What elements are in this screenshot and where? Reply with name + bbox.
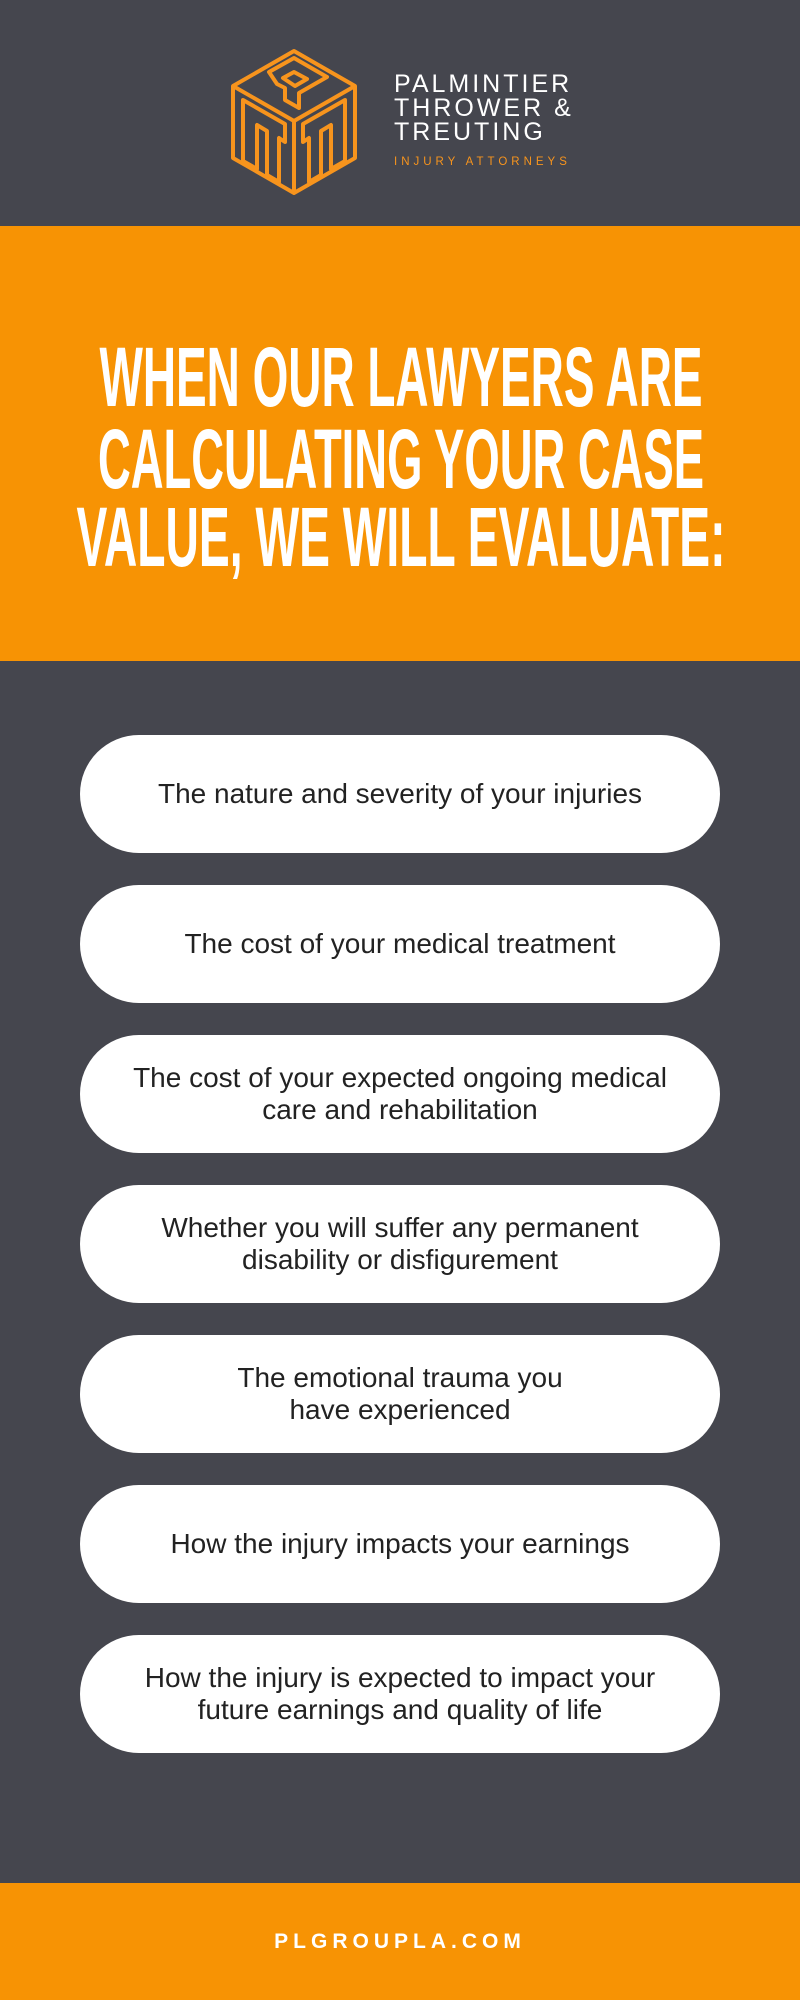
pill 7: future earnings and quality of life [198,1694,602,1725]
pill 5: have experienced [289,1394,511,1425]
logo text: THROWER & [394,94,574,122]
pill 4: Whether you will suffer any permanent [161,1212,639,1243]
pill 3 [80,1035,720,1153]
pill 7 [80,1635,720,1753]
pill 2: The cost of your medical treatment [184,928,616,959]
header: logo: INJURY ATTORNEYS [394,156,571,168]
list of factors [80,735,720,1753]
icon: cube logo [231,49,357,195]
pill 6 [80,1485,720,1603]
footer [0,1883,800,2000]
header: logo [0,0,800,224]
pill 4 [80,1185,720,1303]
logo text: TREUTING [394,118,546,146]
pill 1 [80,735,720,853]
pill 7: How the injury is expected to impact your [145,1662,655,1693]
pill 6: How the injury impacts your earnings [170,1528,630,1559]
pill 3: The cost of your expected ongoing medical [133,1062,667,1093]
pill 1: The nature and severity of your injuries [158,778,642,809]
logo text: PALMINTIER [394,70,572,98]
title band [0,226,800,661]
pill 5 [80,1335,720,1453]
logo text [394,70,574,146]
pill 5: The emotional trauma you [237,1362,563,1393]
footer: PLGROUPLA.COM [274,1930,526,1952]
pill 2 [80,885,720,1003]
pill 4: disability or disfigurement [242,1244,558,1275]
title [76,330,726,584]
pill 3: care and rehabilitation [262,1094,538,1125]
